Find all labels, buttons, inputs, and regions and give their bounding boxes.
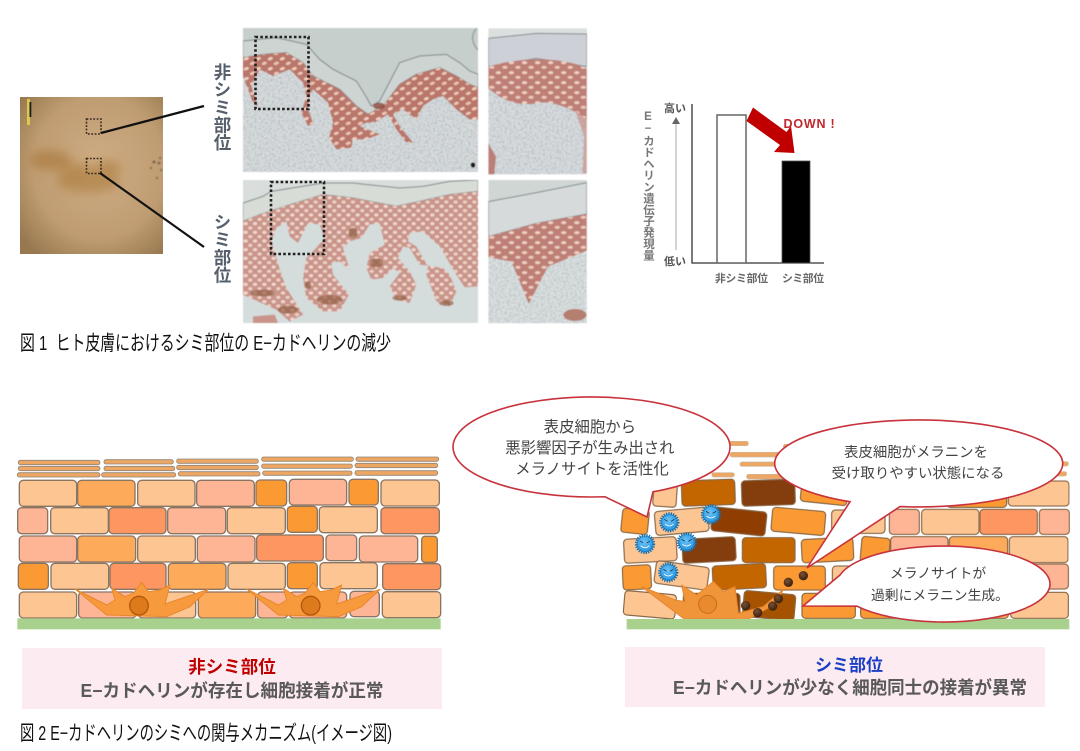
diagram: spot skin — [621, 441, 1069, 629]
axes — [692, 104, 824, 263]
bar chart: E-cadherin expression — [642, 101, 836, 285]
callout: melanin uptake: 表皮細胞がメラニンを — [844, 444, 988, 461]
panel: spot section — [243, 180, 478, 323]
callout: melanin uptake: 受け取りやすい状態になる — [832, 465, 1004, 482]
callout: harmful factors: メラノサイトを活性化 — [515, 460, 669, 478]
harmful factor — [636, 535, 654, 553]
callout: melanin overproduction: メラノサイトが — [890, 566, 986, 581]
magnification frames — [256, 37, 324, 254]
harmful factor — [660, 564, 677, 581]
callout: melanin overproduction: 過剰にメラニン生成。 — [871, 588, 1009, 603]
label: non-spot: 非シミ部位 — [715, 271, 768, 285]
photo: human skin with pigmented spot — [20, 97, 163, 254]
harmful factor — [702, 506, 720, 523]
arrow: down — [746, 108, 794, 153]
label: high: 高い — [664, 101, 686, 115]
callout: harmful factors: 表皮細胞から — [544, 418, 636, 436]
banner: spot: シミ部位 — [815, 656, 883, 675]
panel: non-spot section — [243, 28, 478, 172]
stratum corneum — [712, 441, 1068, 479]
panel: spot magnified — [488, 180, 587, 323]
label: non-spot site: 非シミ部位 — [212, 63, 232, 152]
banner: spot — [625, 647, 1045, 707]
y axis title: E−カドヘリン遺伝子発現量 — [642, 111, 655, 261]
banner: spot: E−カドヘリンが少なく細胞同士の接着が異常 — [673, 677, 1027, 698]
label: low: 低い — [664, 254, 686, 268]
diagram: non-spot skin — [17, 457, 441, 629]
banner: non-spot: 非シミ部位 — [188, 657, 276, 677]
callout: melanin uptake — [775, 420, 1063, 568]
caption: figure 1: 図 1 ヒト皮膚におけるシミ部位の E−カドヘリンの減少 — [20, 332, 391, 355]
basal membrane — [627, 619, 1069, 629]
melanocyte — [642, 582, 783, 618]
bar: spot — [782, 161, 810, 263]
melanocyte — [247, 582, 380, 617]
harmful factor — [661, 514, 678, 531]
banner: non-spot — [22, 648, 442, 709]
caption: figure 2: 図 2 E−カドヘリンのシミへの関与メカニズム(イメージ図) — [20, 722, 392, 745]
melanin granules — [741, 571, 808, 617]
connector lines — [100, 106, 204, 247]
callout: harmful factors: 悪影響因子が生み出され — [505, 439, 675, 457]
bar: non-spot — [717, 115, 746, 263]
melanocyte — [75, 582, 208, 617]
label: spot: シミ部位 — [782, 271, 824, 285]
keratinocyte bricks — [18, 479, 441, 618]
stratum corneum — [17, 457, 439, 477]
callout: melanin overproduction — [803, 546, 1050, 622]
harmful factor — [678, 534, 695, 551]
basal membrane — [17, 618, 441, 629]
keratinocyte bricks — [621, 479, 1069, 621]
label: DOWN: DOWN ! — [784, 117, 836, 131]
grey arrow — [672, 117, 680, 250]
panel: non-spot magnified — [488, 28, 587, 174]
label: spot site: シミ部位 — [212, 213, 232, 284]
banner: non-spot: E−カドヘリンが存在し細胞接着が正常 — [80, 680, 384, 701]
callout: harmful factors — [453, 397, 730, 517]
